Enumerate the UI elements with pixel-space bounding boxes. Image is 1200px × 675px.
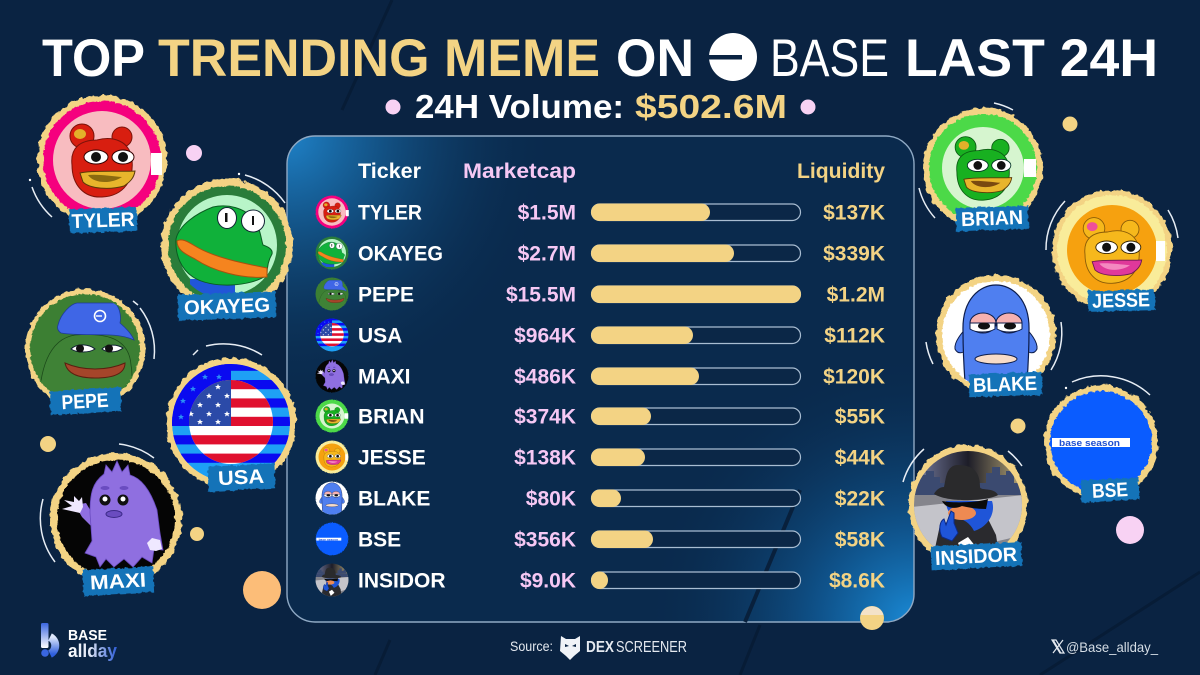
table header: Ticker <box>358 160 421 183</box>
row: MAXI: MAXI <box>358 366 410 388</box>
row: BRIAN <box>316 400 885 432</box>
row: JESSE: $138K <box>514 446 576 470</box>
row: BLAKE: BLAKE <box>358 488 430 510</box>
row: BLAKE <box>316 482 885 516</box>
panel: token table <box>287 136 914 622</box>
icon: X <box>1052 640 1064 653</box>
row: BLAKE: $22K <box>835 488 885 510</box>
row: BRIAN: $374K <box>514 406 576 428</box>
row: MAXI: $486K <box>514 366 576 388</box>
icon: base logo <box>708 33 757 81</box>
avatar: TYLER <box>29 95 167 233</box>
table header: Liquidity <box>797 160 885 183</box>
row: PEPE <box>316 278 885 312</box>
title: TRENDING MEME <box>158 29 600 88</box>
title: LAST 24H <box>905 29 1158 88</box>
avatar: TYLER: TYLER <box>71 209 135 233</box>
row: JESSE: $44K <box>835 446 885 470</box>
avatar: PEPE <box>25 289 154 415</box>
avatar: BRIAN: BRIAN <box>961 207 1023 231</box>
row: USA: USA <box>358 324 402 348</box>
avatar: BLAKE <box>926 275 1062 397</box>
row: JESSE <box>316 440 885 474</box>
avatar: MAXI <box>40 444 182 596</box>
row: JESSE: JESSE <box>358 446 426 470</box>
source: DEX Screener: DEX <box>586 639 615 656</box>
row: INSIDOR <box>315 563 885 597</box>
logo: BASE allday: allday <box>68 641 117 661</box>
avatar: BRIAN <box>919 103 1043 231</box>
title: TOP <box>42 29 145 88</box>
row: USA: $112K <box>824 324 885 348</box>
row: TYLER: $1.5M <box>518 202 576 224</box>
row: TYLER: $137K <box>823 202 885 224</box>
avatar: PEPE: PEPE <box>61 390 109 414</box>
table header <box>358 160 885 183</box>
avatar: JESSE <box>1046 190 1178 313</box>
decorative dots <box>40 116 1144 609</box>
row: BSE: $58K <box>835 528 885 552</box>
row: BRIAN: BRIAN <box>358 406 424 428</box>
subtitle: 24H volume: 24H Volume: <box>415 88 624 125</box>
row: BSE: $356K <box>514 528 576 552</box>
row: PEPE: PEPE <box>358 284 414 306</box>
icon: eagle <box>560 636 580 660</box>
row: TYLER: TYLER <box>358 202 422 224</box>
avatar: BSE: BSE <box>1092 479 1129 503</box>
row: OKAYEG: $2.7M <box>518 242 576 266</box>
avatar: OKAYEG <box>161 173 293 321</box>
source: DEX Screener: SCREENER <box>616 639 687 656</box>
row: TYLER <box>315 195 885 229</box>
title: ON <box>616 29 694 88</box>
row: USA: $964K <box>514 324 576 348</box>
row: MAXI: $120K <box>823 366 885 388</box>
logo: BASE allday: BASE <box>68 628 107 644</box>
avatar: USA <box>166 344 296 492</box>
subtitle: 24H volume: $502.6M <box>635 88 787 125</box>
source: DEX Screener <box>510 636 687 660</box>
avatar: INSIDOR: INSIDOR <box>935 544 1018 570</box>
row: BSE: BSE <box>358 528 401 552</box>
avatar: INSIDOR <box>903 445 1028 570</box>
avatar: BLAKE: BLAKE <box>973 373 1037 397</box>
title: BASE <box>770 29 889 88</box>
row: INSIDOR: $8.6K <box>829 570 885 592</box>
background creases <box>342 0 1200 675</box>
row: OKAYEG <box>315 236 885 270</box>
row: INSIDOR: INSIDOR <box>358 570 446 592</box>
row: MAXI <box>315 359 885 393</box>
row: BLAKE: $80K <box>526 488 576 510</box>
row: USA <box>315 318 885 352</box>
row: OKAYEG: OKAYEG <box>358 242 443 266</box>
subtitle: 24H volume <box>386 88 816 125</box>
table header: Marketcap <box>463 160 576 183</box>
row: PEPE: $1.2M <box>827 284 885 306</box>
title <box>42 29 1158 88</box>
avatar: OKAYEG: OKAYEG <box>184 295 270 319</box>
row: OKAYEG: $339K <box>823 242 885 266</box>
source: DEX Screener: Source: <box>510 638 553 654</box>
avatar: MAXI: MAXI <box>90 570 147 594</box>
avatar: JESSE: JESSE <box>1092 289 1150 313</box>
logo: BASE allday <box>41 623 117 661</box>
panel corner dot <box>860 606 884 630</box>
row: INSIDOR: $9.0K <box>520 570 576 592</box>
avatar: USA: USA <box>218 466 265 490</box>
row: BSE <box>316 523 885 555</box>
row: PEPE: $15.5M <box>506 284 576 306</box>
row: BRIAN: $55K <box>835 406 885 428</box>
social handle: @Base_allday_ <box>1066 639 1158 655</box>
avatar: BSE <box>1044 376 1158 503</box>
